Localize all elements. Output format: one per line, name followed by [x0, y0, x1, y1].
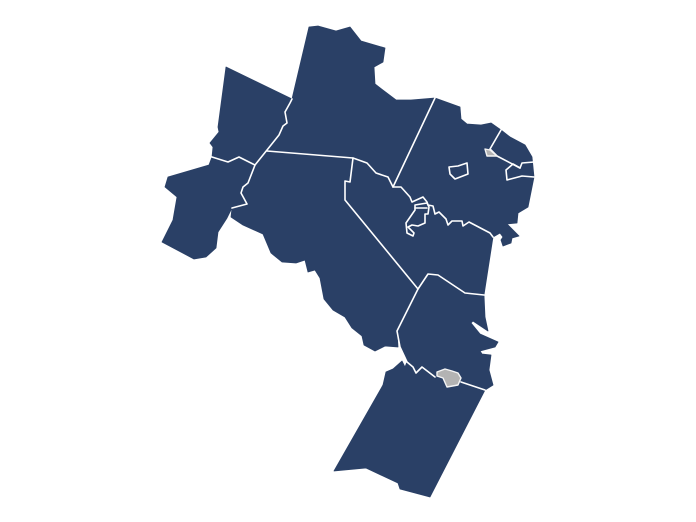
- region: east small district: [490, 130, 534, 168]
- region: south west: [162, 157, 255, 259]
- region: central: [231, 151, 418, 351]
- region borders: [212, 98, 493, 390]
- region: north east enclave: [449, 163, 468, 179]
- region: north west: [210, 67, 292, 165]
- region: north east: [393, 98, 534, 246]
- region: east coastal district: [506, 164, 534, 180]
- region: small grey area north east: [485, 149, 497, 156]
- region: grey highlighted area: [437, 369, 461, 387]
- region: middle: [345, 158, 493, 295]
- region: south east: [397, 274, 498, 390]
- region: south: [334, 361, 485, 497]
- region: river island: [406, 203, 429, 236]
- region: north: [267, 26, 435, 187]
